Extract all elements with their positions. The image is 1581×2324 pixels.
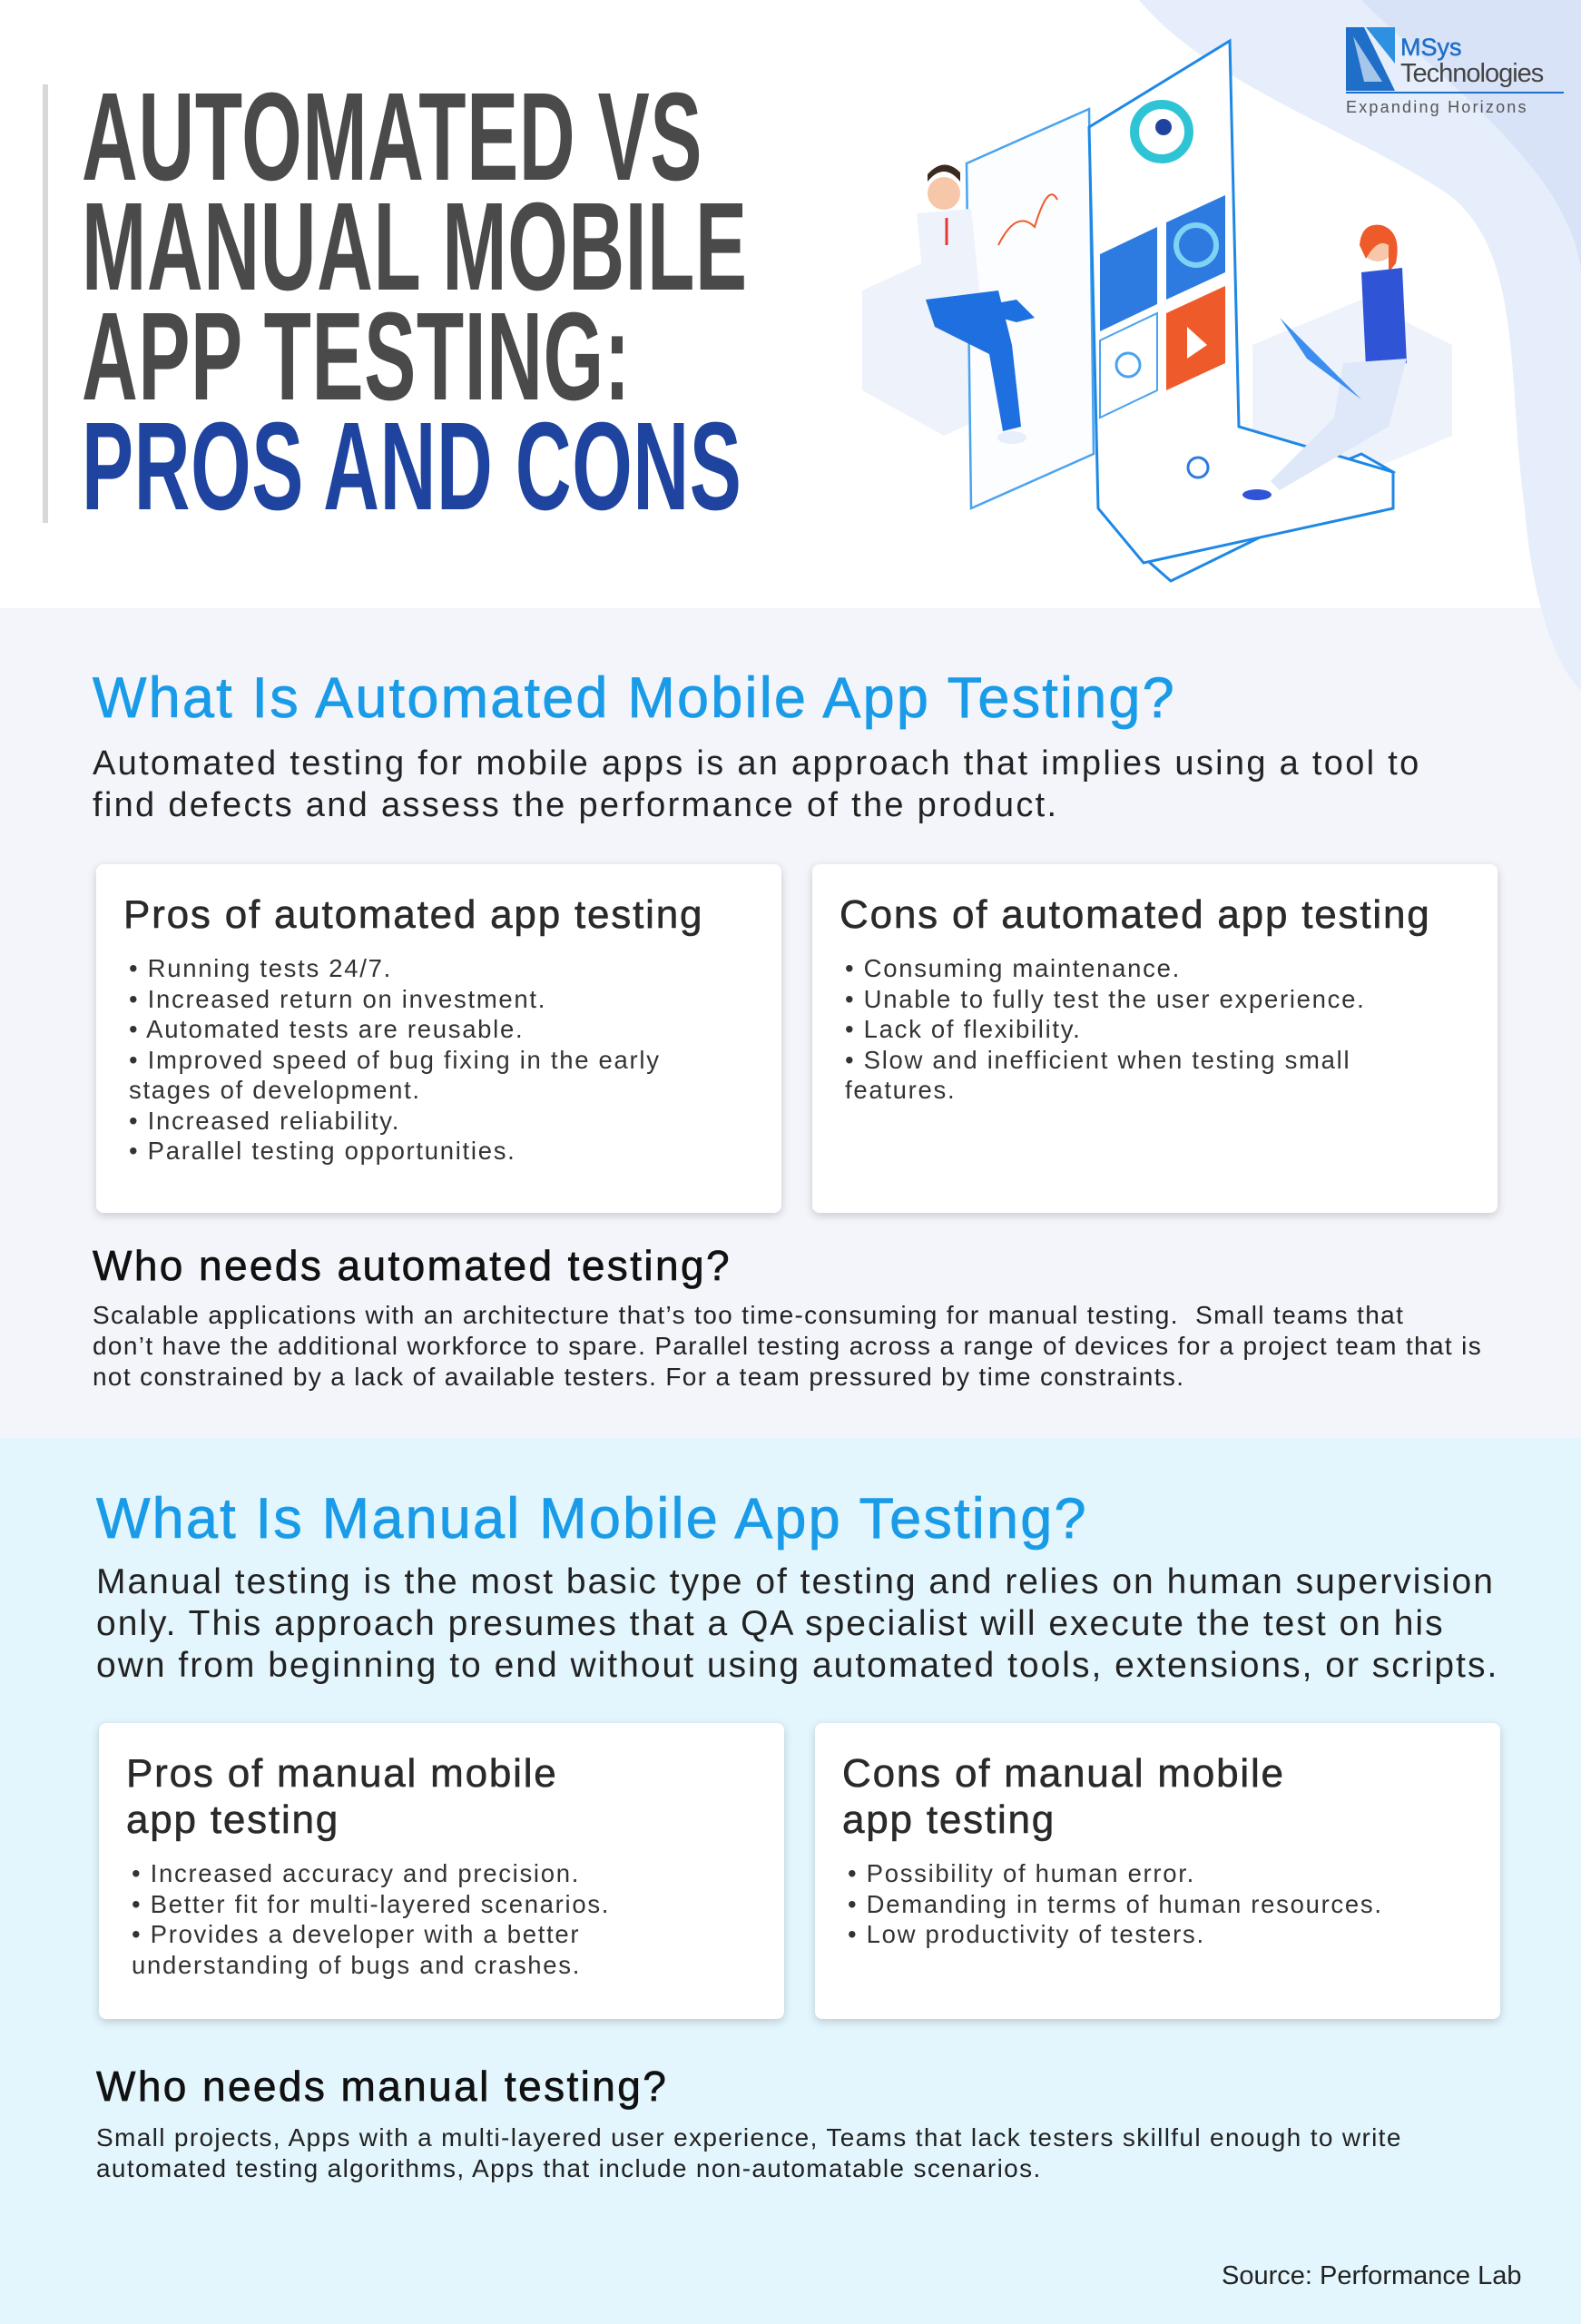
source: Source: Performance Lab (1222, 2261, 1521, 2290)
logo mark (1346, 27, 1395, 91)
text: manual definition (96, 1562, 1498, 1685)
card title: app testing (842, 1797, 1056, 1842)
bullet list: • Running tests 24/7. (129, 954, 392, 982)
man (917, 164, 1035, 444)
phone base (1134, 454, 1393, 581)
text: who needs manual (96, 2123, 1402, 2182)
title: PROS AND CONS (82, 397, 741, 537)
bullet list: • Increased return on investment. (129, 984, 546, 1013)
logo: Expanding Horizons (1346, 98, 1528, 116)
text: who needs manual: Small projects, Apps with a multi-layered user experience, Teams that lack testers skillful enough to write (96, 2123, 1402, 2152)
text: who needs automated: not constrained by a lack of available testers. For a team pressured by time constraints. (93, 1363, 1184, 1391)
bullet list: • Parallel testing opportunities. (129, 1137, 516, 1165)
card title (126, 1751, 558, 1842)
woman (1242, 225, 1407, 500)
panel: cons of manual (815, 1723, 1500, 2019)
bullet list: • Better fit for multi-layered scenarios. (132, 1890, 610, 1917)
background: section 1 (0, 608, 1581, 1438)
wavy line (998, 194, 1057, 245)
logo: Technologies (1400, 59, 1543, 88)
bullet list (848, 1859, 1383, 1948)
decorative wave top right (1139, 0, 1581, 690)
bullet list: • Slow and inefficient when testing small (845, 1046, 1350, 1073)
text: who needs manual: automated testing algorithms, Apps that include non-automatable scenarios. (96, 2154, 1042, 2182)
panel: cons of automated (812, 864, 1498, 1213)
bullet list: • Lack of flexibility. (845, 1015, 1082, 1043)
heading: who needs manual: Who needs manual testing? (96, 2063, 668, 2110)
bullet list: • Automated tests are reusable. (129, 1015, 524, 1043)
bullet list: • Unable to fully test the user experience. (845, 984, 1365, 1013)
panel: pros of automated (96, 864, 781, 1213)
bullet list: • Demanding in terms of human resources. (848, 1890, 1383, 1917)
text: automated definition (93, 744, 1421, 824)
text: who needs automated: don’t have the additional workforce to spare. Parallel testing across a range of devices for a project team that is (93, 1332, 1482, 1360)
bullet list: • Consuming maintenance. (845, 954, 1181, 982)
bullet list: • Increased accuracy and precision. (132, 1859, 580, 1887)
text: who needs automated (93, 1301, 1482, 1391)
text: who needs automated: Scalable applications with an architecture that’s too time-consuming for manual testing. Small teams that (93, 1301, 1404, 1329)
bullet list: • Provides a developer with a better (132, 1920, 580, 1948)
text: manual definition: own from beginning to end without using automated tools, extensions, or scripts. (96, 1646, 1498, 1685)
title accent bar (43, 84, 48, 523)
text: automated definition: find defects and assess the performance of the product. (93, 786, 1058, 824)
text: automated definition: Automated testing for mobile apps is an approach that implies using a tool to (93, 744, 1421, 783)
bullet list: features. (845, 1076, 956, 1104)
title: AUTOMATED VS (82, 67, 702, 207)
card title (842, 1751, 1285, 1842)
heading: automated: What Is Automated Mobile App Testing? (93, 666, 1176, 730)
title: MANUAL MOBILE (82, 177, 748, 317)
bullet list (132, 1859, 610, 1979)
bullet list: • Low productivity of testers. (848, 1920, 1205, 1948)
illustration: people and phone (862, 38, 1452, 583)
bullet list (129, 954, 661, 1165)
main phone (1089, 41, 1393, 563)
bullet list (845, 954, 1365, 1104)
logo text: MSys (1400, 34, 1461, 61)
text: manual definition: Manual testing is the most basic type of testing and relies on human supervision (96, 1562, 1495, 1601)
heading: who needs automated: Who needs automated testing? (93, 1242, 732, 1289)
card title: Pros of manual mobile (126, 1751, 558, 1796)
background: section 2 (0, 1438, 1581, 2324)
platform left (862, 245, 1044, 436)
bullet list: • Improved speed of bug fixing in the early (129, 1046, 661, 1073)
card title: Cons of automated app testing (840, 892, 1430, 937)
card title: Cons of manual mobile (842, 1751, 1285, 1796)
bullet list: understanding of bugs and crashes. (132, 1950, 581, 1979)
card title: Pros of automated app testing (123, 892, 703, 937)
logo (1346, 27, 1564, 116)
text: manual definition: only. This approach presumes that a QA specialist will execute the test on his (96, 1604, 1445, 1643)
panel: pros of manual (99, 1723, 784, 2019)
title: APP TESTING: (82, 287, 631, 427)
bullet list: stages of development. (129, 1076, 421, 1104)
back panel (967, 109, 1094, 508)
heading: manual: What Is Manual Mobile App Testing? (96, 1487, 1088, 1551)
platform right (1252, 300, 1452, 481)
card title: app testing (126, 1797, 339, 1842)
bullet list: • Increased reliability. (129, 1106, 400, 1135)
title (82, 67, 748, 537)
bullet list: • Possibility of human error. (848, 1859, 1195, 1887)
